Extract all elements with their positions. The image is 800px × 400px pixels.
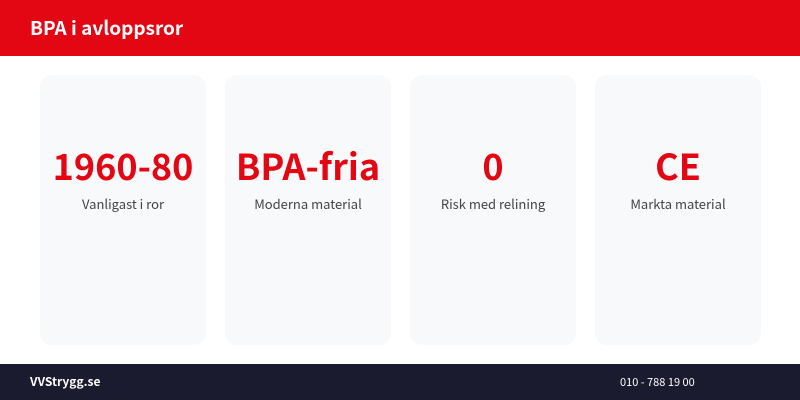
stat label: Markta material [630, 194, 726, 213]
stat value: 0 [482, 139, 504, 191]
card: 0 [410, 75, 576, 345]
stat value: 1960-80 [53, 139, 193, 191]
stat value: CE [655, 139, 701, 191]
stat label: Vanligast i ror [82, 194, 164, 213]
stat value: BPA-fria [236, 139, 380, 191]
card: CE [595, 75, 761, 345]
footer bar [0, 364, 800, 400]
header bar [0, 0, 800, 56]
stat label: Risk med relining [441, 194, 545, 213]
stat label: Moderna material [254, 194, 362, 213]
card: 1960-80 [40, 75, 206, 345]
card: BPA-fria [225, 75, 391, 345]
brand: VVStrygg.se [30, 373, 100, 390]
title: BPA i avloppsror [30, 14, 183, 41]
phone: 010 - 788 19 00 [620, 374, 695, 390]
